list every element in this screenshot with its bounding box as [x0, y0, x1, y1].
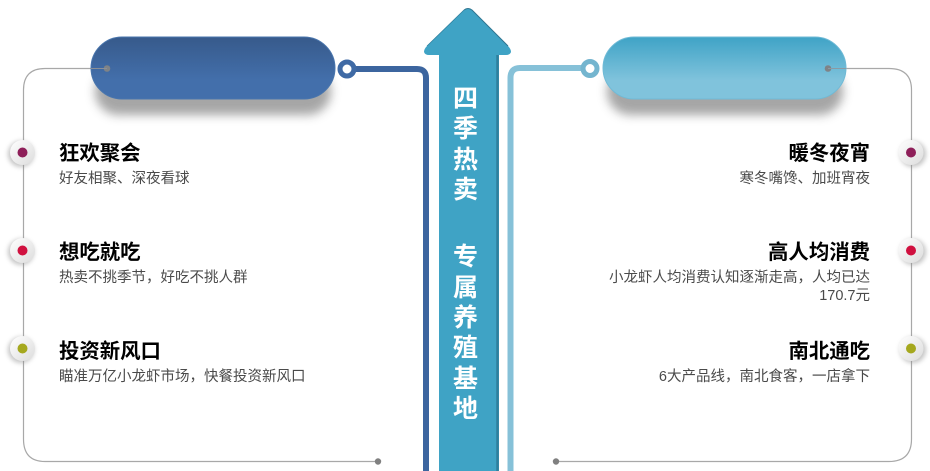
right node 3: [898, 336, 926, 363]
vertical arrow title: 地: [453, 395, 478, 423]
vertical arrow title: 四: [453, 85, 478, 113]
left item: 投资新风口: 投资新风口: [59, 341, 161, 363]
right item: 高人均消费: 小龙虾人均消费认知逐渐走高，人均已达: [609, 270, 870, 286]
left node 3: [8, 336, 35, 363]
right node 2: [898, 238, 926, 265]
left item: 想吃就吃: 想吃就吃: [59, 242, 141, 264]
left grey outline: [24, 68, 381, 465]
left item: 想吃就吃: 热卖不挑季节，好吃不挑人群: [59, 270, 248, 286]
vertical arrow title: 基: [453, 365, 478, 393]
right item: 南北通吃: [659, 340, 870, 385]
left item: 想吃就吃: [59, 241, 248, 286]
left pill: [91, 37, 335, 115]
right item: 南北通吃: 6大产品线，南北食客，一店拿下: [659, 369, 870, 385]
left node 1: [8, 140, 35, 167]
left item: 狂欢聚会: 好友相聚、深夜看球: [59, 171, 190, 187]
center arrow: [424, 8, 511, 471]
vertical arrow title: 热: [453, 146, 478, 174]
left item: 投资新风口: 瞄准万亿小龙虾市场，快餐投资新风口: [59, 369, 306, 385]
left item: 狂欢聚会: 狂欢聚会: [59, 143, 141, 165]
right item: 暖冬夜宵: 暖冬夜宵: [788, 143, 870, 165]
right item: 高人均消费: 高人均消费: [768, 242, 870, 264]
left item: 狂欢聚会: [59, 142, 190, 187]
right item: 暖冬夜宵: [740, 142, 870, 187]
right item: 暖冬夜宵: 寒冬嘴馋、加班宵夜: [740, 171, 870, 187]
vertical arrow title: 季: [453, 115, 478, 143]
right item: 高人均消费: 170.7元: [819, 288, 870, 304]
right item: 南北通吃: 南北通吃: [788, 341, 870, 363]
vertical arrow title: 殖: [453, 334, 478, 362]
right item: 高人均消费: [609, 241, 870, 304]
vertical arrow title: 专: [453, 243, 478, 271]
left node 2: [8, 238, 35, 265]
left connector: [340, 62, 426, 471]
vertical arrow title: 属: [453, 274, 478, 302]
right node 1: [898, 140, 926, 167]
right grey outline: [553, 68, 912, 465]
right connector: [510, 62, 597, 471]
vertical arrow title: 卖: [453, 176, 478, 204]
left item: 投资新风口: [59, 340, 306, 385]
right pill: [603, 37, 846, 115]
vertical arrow title: 养: [453, 304, 478, 332]
vertical arrow title: [453, 85, 478, 423]
